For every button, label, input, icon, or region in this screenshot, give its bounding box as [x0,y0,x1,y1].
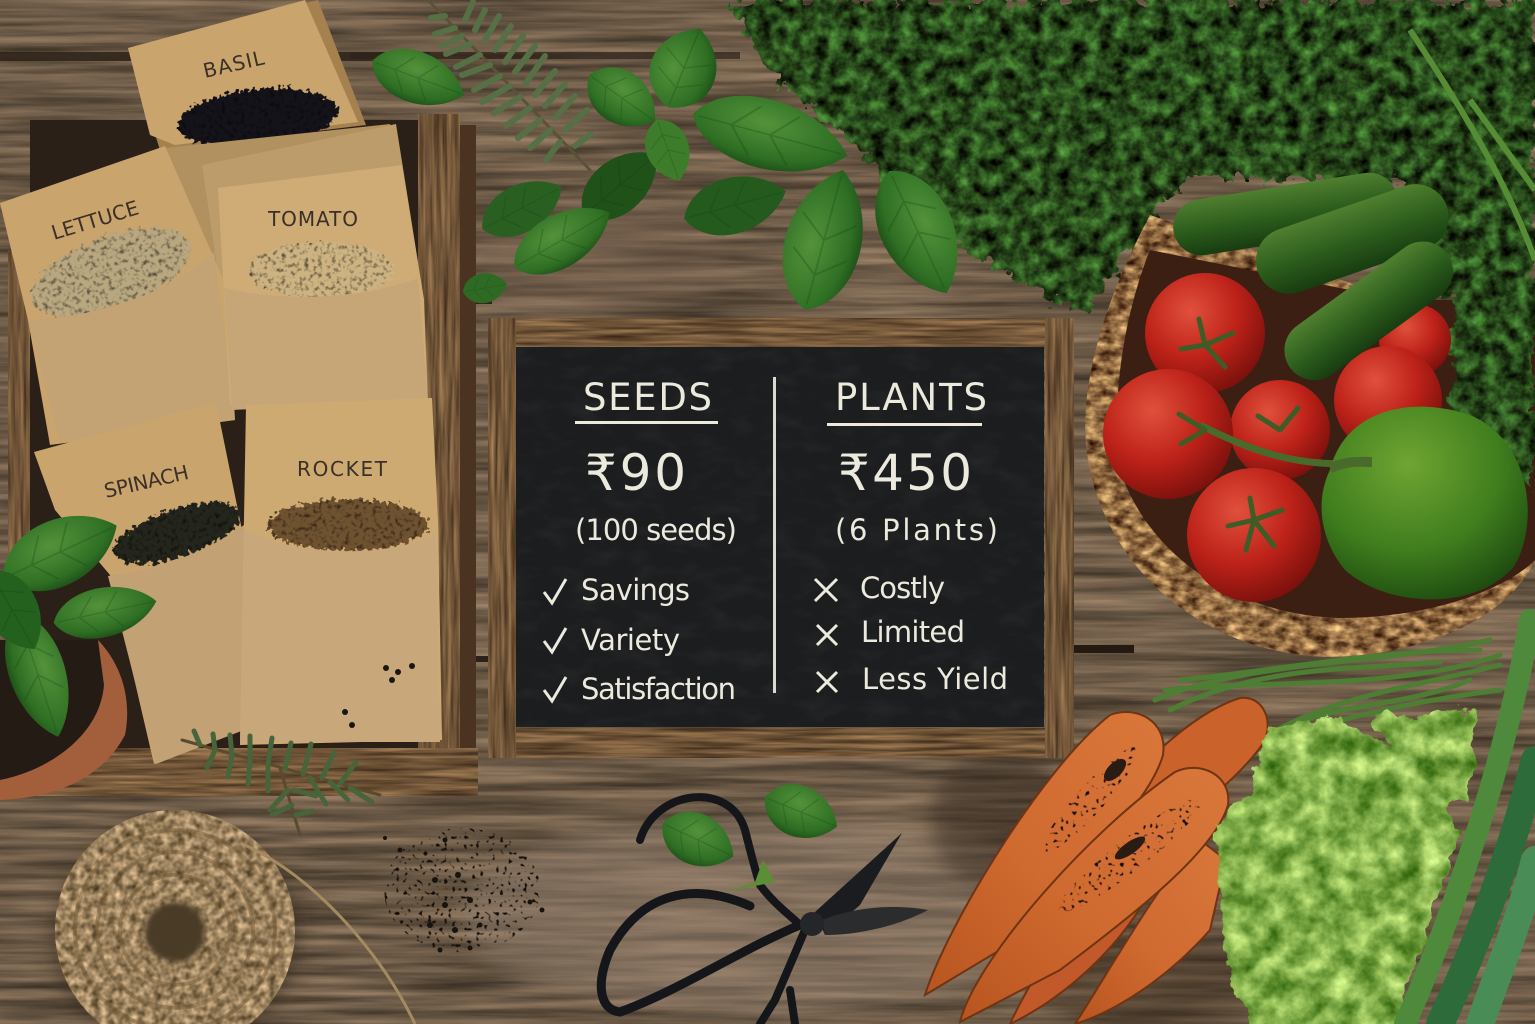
seed packet: rocket: ROCKET [297,457,388,481]
loose basil leaf [363,37,473,119]
seed packet: rocket [240,398,442,745]
plants column: Less Yield [862,662,1008,696]
seeds column: Variety [581,623,680,657]
seeds column: SEEDS [583,376,712,419]
seeds column: ₹90 [585,444,686,502]
woven basket [1085,215,1535,657]
seed packet: basil: BASIL [201,45,267,83]
seed packet: tomato: TOMATO [267,207,358,231]
wooden seed crate [8,114,478,796]
garden scissors [601,797,928,1024]
seed packet: lettuce [0,146,235,445]
seed packet: basil [128,0,366,155]
small basil leaves by scissors [652,774,847,892]
carrots [925,698,1268,1024]
twine ball [50,810,415,1024]
rosemary sprig top [430,2,591,170]
potted basil [0,496,161,800]
plants column: PLANTS [835,376,987,419]
lettuce [1215,710,1478,1024]
scattered black seeds [383,828,544,952]
basil bunch [460,16,979,320]
chalk divider [773,377,776,693]
rosemary sprig on crate [182,731,380,835]
carrot tops under basket [1155,640,1500,765]
seed packet: spinach [34,402,247,764]
plants column: (6 Plants) [835,513,998,547]
seed packet: spinach: SPINACH [102,460,191,503]
spring onions [1405,620,1535,1024]
carrot greens over basket [1400,30,1535,490]
plants column: Costly [860,571,945,605]
back paper sleeves [165,124,424,300]
seeds column: Savings [581,573,690,607]
seeds column [544,376,737,706]
chalkboard [488,318,1074,758]
plants column: Limited [861,615,965,649]
tomatoes, cucumbers and pepper [1103,169,1528,602]
plants column: ₹450 [838,444,972,502]
parsley and carrot greens [728,0,1535,310]
seed packet: lettuce: LETTUCE [48,196,142,245]
plants column [815,376,1008,696]
seeds column: Satisfaction [581,672,736,706]
seeds column: (100 seeds) [575,513,737,547]
seed packet: tomato [218,165,428,410]
